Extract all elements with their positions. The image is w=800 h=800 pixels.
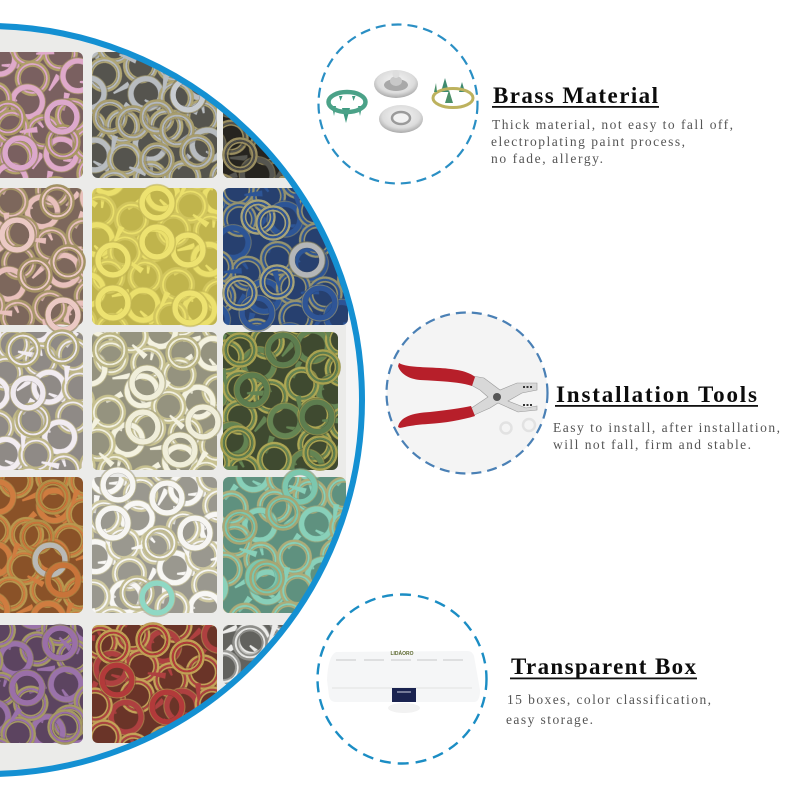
text: tools description: will not fall, firm and stable. [553, 437, 751, 452]
compartment: purple [0, 625, 83, 744]
text: brass description: Thick material, not easy to fall off, [492, 117, 733, 132]
compartment: yellow [92, 185, 217, 326]
text: brass description: no fade, allergy. [491, 151, 603, 166]
icon: silver stud top [374, 70, 418, 98]
dashed circle: box [318, 594, 486, 764]
compartment: grey, top row [92, 52, 217, 178]
feature: installation tools [386, 312, 780, 474]
text: brass description: electroplating paint process, [491, 134, 685, 149]
compartment: red [92, 624, 217, 743]
compartment: orange [0, 477, 83, 613]
icon: plastic box: LIDÁORO [390, 650, 414, 657]
text: box description: 15 boxes, color classification, [507, 692, 711, 707]
dashed circle: snap parts [318, 24, 478, 184]
compartment: navy [223, 188, 348, 331]
dashed circle: pliers [386, 312, 548, 474]
compartment: black, top row [222, 113, 286, 178]
icon: plastic box [327, 650, 480, 713]
panel: organiser box photo in circle [0, 20, 380, 780]
compartment: lavender white [0, 330, 83, 470]
feature: brass material [318, 24, 733, 184]
compartment: green [222, 332, 340, 470]
heading: Installation Tools: Installation Tools [556, 382, 757, 407]
icon: small rings [500, 419, 535, 434]
icon: pliers [398, 363, 537, 428]
compartment: white [92, 467, 217, 616]
text: tools description [553, 420, 780, 452]
icon: green prong ring [328, 92, 366, 123]
text: brass description [491, 117, 733, 166]
heading: Transparent Box: Transparent Box [511, 654, 696, 679]
heading: Brass Material: Brass Material [493, 83, 658, 108]
compartment: ivory [92, 332, 221, 470]
text: tools description: Easy to install, after installation, [553, 420, 780, 435]
blue circle border [0, 26, 362, 774]
text: box description: easy storage. [506, 712, 593, 727]
feature: transparent box [318, 594, 711, 764]
text: box description [506, 692, 711, 727]
icon: brass prong ring [433, 78, 473, 108]
compartment: mint [223, 469, 346, 613]
compartment: pink, top row [0, 52, 83, 178]
compartment: pale pink [0, 186, 84, 333]
compartment: silver white [223, 625, 283, 684]
icon: silver stud bottom [379, 105, 423, 133]
